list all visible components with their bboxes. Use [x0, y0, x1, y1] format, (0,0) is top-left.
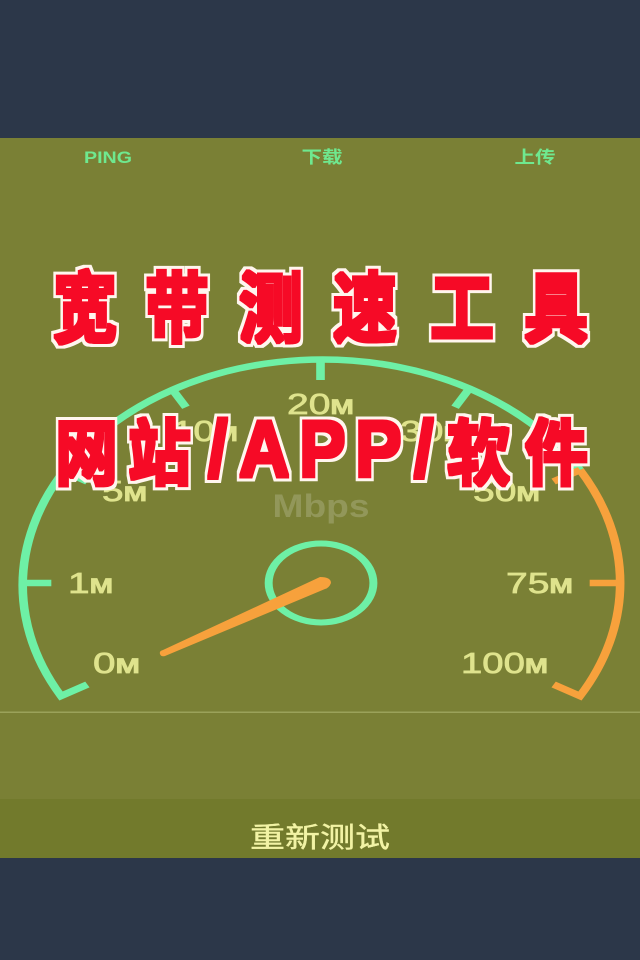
bottom dark band [0, 858, 640, 960]
label 75M: 75 M [506, 568, 573, 600]
label 30M: 30 M [400, 416, 467, 448]
needle [160, 577, 331, 656]
green ticks [21, 357, 470, 583]
gauge [21, 357, 620, 696]
scale labels [68, 389, 573, 680]
label 5M: 5 M [102, 476, 147, 508]
label 0M: 0 M [93, 648, 140, 680]
title line 1: 宽带测速工具 [53, 266, 588, 352]
title line 2: 网站 [55, 415, 191, 495]
unit label Mbps: Mbps [272, 488, 370, 524]
label 20M: 20 M [287, 389, 354, 421]
speed test panel [0, 138, 640, 858]
retest button [0, 799, 640, 858]
label 100M: 100 M [461, 648, 548, 680]
label 1M: 1 M [68, 568, 113, 600]
retest label: 重新测试 [250, 822, 390, 853]
title line 2: 软件 [447, 415, 588, 495]
label 50M: 50 M [473, 476, 540, 508]
centre ring [269, 544, 373, 622]
orange ticks [554, 470, 620, 583]
header: download: 下载 [302, 148, 342, 167]
top dark band [0, 0, 640, 138]
label 10M: 10 M [172, 416, 238, 448]
orange arc [554, 470, 620, 696]
title line 2: /APP/ [208, 404, 434, 494]
header: PING: PING [84, 148, 132, 167]
divider line [0, 712, 640, 713]
green arc [23, 360, 580, 696]
header: upload: 上传 [514, 148, 556, 167]
